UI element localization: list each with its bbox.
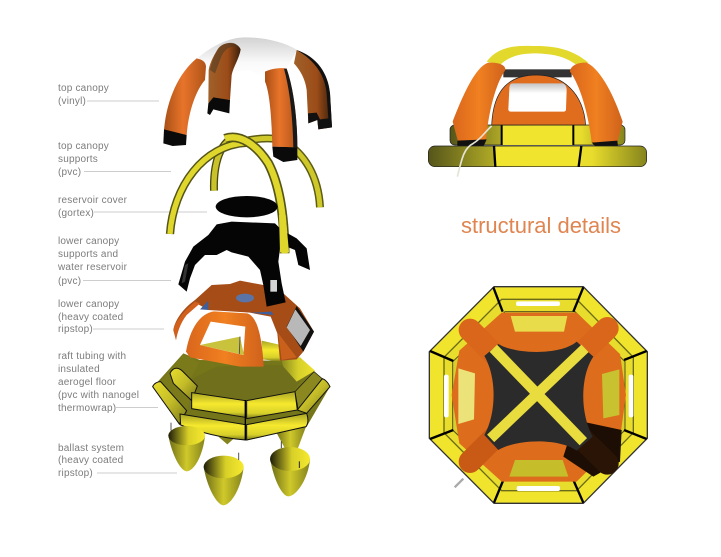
label: lower canopy: (heavy coated [58, 312, 123, 323]
label: raft tubing: raft tubing with [58, 351, 126, 362]
label: lower canopy supports and water reservoir: lower canopy [58, 236, 119, 247]
labels column [57, 83, 207, 479]
yellow X supports [491, 348, 585, 442]
left inner tube [170, 368, 197, 401]
front inner walls [192, 393, 245, 417]
label: raft tubing: (pvc with nanogel [58, 390, 139, 401]
centre canopy [492, 75, 586, 125]
dark centre [484, 342, 593, 451]
label: lower canopy supports and water reservoir [57, 236, 171, 287]
octagon dividers [430, 287, 647, 503]
lower tube [428, 146, 647, 167]
front outer tubes [180, 414, 245, 440]
ballast system [218, 427, 306, 452]
label: ballast system [58, 443, 177, 479]
label: raft tubing: insulated [58, 364, 100, 375]
label: top canopy supports [58, 141, 171, 178]
side view of raft [428, 46, 647, 177]
top canopy supports [170, 137, 320, 253]
label: raft tubing: aerogel floor [58, 377, 117, 388]
label: lower canopy: lower canopy [58, 299, 119, 310]
label: raft tubing: thermowrap) [58, 403, 116, 414]
label: top canopy supports: supports [58, 154, 98, 165]
back cones [218, 427, 306, 452]
raft tubing with aerogel floor [153, 341, 330, 441]
label: reservoir cover [58, 195, 207, 219]
title: structural details [461, 213, 621, 238]
exploded diagram: top parts [163, 37, 332, 253]
right pillar [570, 63, 623, 143]
canopy windows [511, 316, 567, 332]
left pillar [453, 63, 505, 143]
ballast system front cones [168, 423, 310, 505]
lower canopy supports and water reservoir [178, 215, 310, 307]
label: reservoir cover: (gortex) [58, 208, 94, 219]
label: ballast system: ripstop) [58, 468, 93, 479]
yellow arch [487, 46, 588, 65]
right inner wall [295, 372, 322, 410]
top view of raft [429, 287, 647, 503]
ballast cone centre [204, 453, 244, 505]
ballast cone left [168, 423, 205, 471]
label: raft tubing [58, 351, 158, 414]
label: top canopy: top canopy [58, 83, 109, 94]
lower canopy [173, 281, 314, 367]
orange arms [470, 328, 607, 463]
octagon hull [429, 287, 647, 503]
label: lower canopy supports and water reservoir: water reservoir [57, 262, 128, 273]
label: top canopy: (vinyl) [58, 96, 86, 107]
label: lower canopy supports and water reservoir: (pvc) [58, 276, 81, 287]
orange lower canopy [452, 313, 626, 482]
rope [455, 479, 463, 487]
label: reservoir cover: reservoir cover [58, 195, 128, 206]
upper tube [450, 125, 625, 145]
label: top canopy [58, 83, 159, 107]
top canopy [163, 37, 332, 162]
rope [457, 126, 492, 177]
window [508, 83, 567, 112]
label: lower canopy supports and water reservoir: supports and [58, 249, 118, 260]
label: top canopy supports: top canopy [58, 141, 109, 152]
reservoir cover [216, 196, 278, 217]
slots [444, 301, 633, 491]
label: lower canopy [58, 299, 164, 335]
label: ballast system: (heavy coated [58, 455, 123, 466]
label: lower canopy: ripstop) [58, 324, 93, 335]
left outer tube [153, 382, 187, 424]
label: top canopy supports: (pvc) [58, 167, 81, 178]
floor [190, 365, 303, 400]
ballast cone right [270, 441, 310, 496]
label: ballast system: ballast system [58, 443, 124, 454]
back wall [262, 341, 281, 362]
right outer tube [297, 379, 330, 413]
